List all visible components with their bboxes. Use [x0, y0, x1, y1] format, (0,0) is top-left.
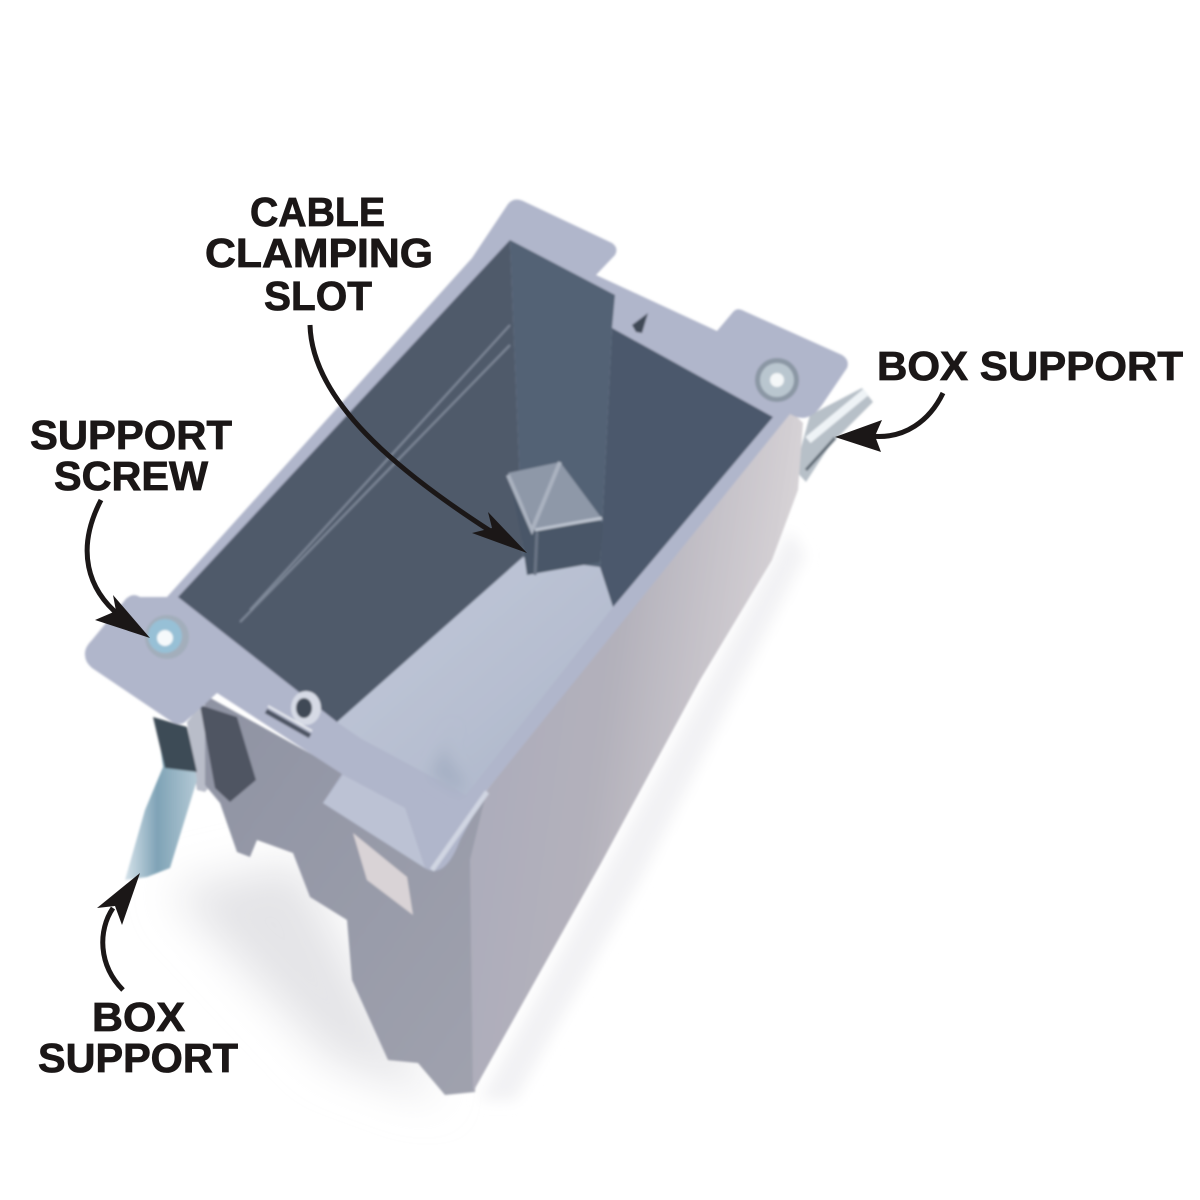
box body: front face	[200, 695, 487, 1095]
arrow: box support left	[97, 873, 140, 990]
small screw slot left	[266, 691, 321, 736]
interior floor	[337, 557, 613, 795]
interior back column	[510, 240, 615, 567]
label: box support left	[38, 994, 238, 1081]
cable clamping slot tab	[508, 462, 603, 575]
box support metal bracket right	[795, 388, 873, 482]
interior right wall	[600, 328, 773, 607]
label: support screw: SCREW	[54, 453, 208, 499]
product label	[353, 833, 413, 915]
label: support screw	[30, 412, 232, 499]
label: cable clamping slot: SLOT	[264, 273, 372, 319]
small screw slot top	[632, 313, 648, 333]
label: cable clamping slot: CABLE	[250, 189, 385, 235]
support screw left	[145, 615, 189, 659]
arrow: box support right	[835, 393, 943, 452]
label: box support left: BOX	[92, 994, 185, 1040]
arrow: cable clamping slot	[310, 325, 527, 553]
dark recess on front face	[200, 705, 256, 802]
label: box support right: BOX SUPPORT	[877, 343, 1183, 389]
wall groove	[240, 325, 510, 622]
arrow: support screw	[87, 500, 150, 638]
top rim with mounting tabs	[85, 200, 848, 871]
box support metal bracket left	[125, 700, 215, 880]
floor dimple detail	[430, 725, 463, 795]
box body: right face	[470, 405, 803, 1092]
interior left wall	[178, 240, 523, 722]
label: cable clamping slot: CLAMPING	[205, 230, 433, 276]
label: cable clamping slot	[205, 189, 433, 319]
label: box support left: SUPPORT	[38, 1035, 238, 1081]
electrical box photo illustration	[85, 200, 873, 1095]
shadow under box	[170, 530, 805, 1100]
label: support screw: SUPPORT	[30, 412, 232, 458]
support screw right	[755, 358, 799, 402]
